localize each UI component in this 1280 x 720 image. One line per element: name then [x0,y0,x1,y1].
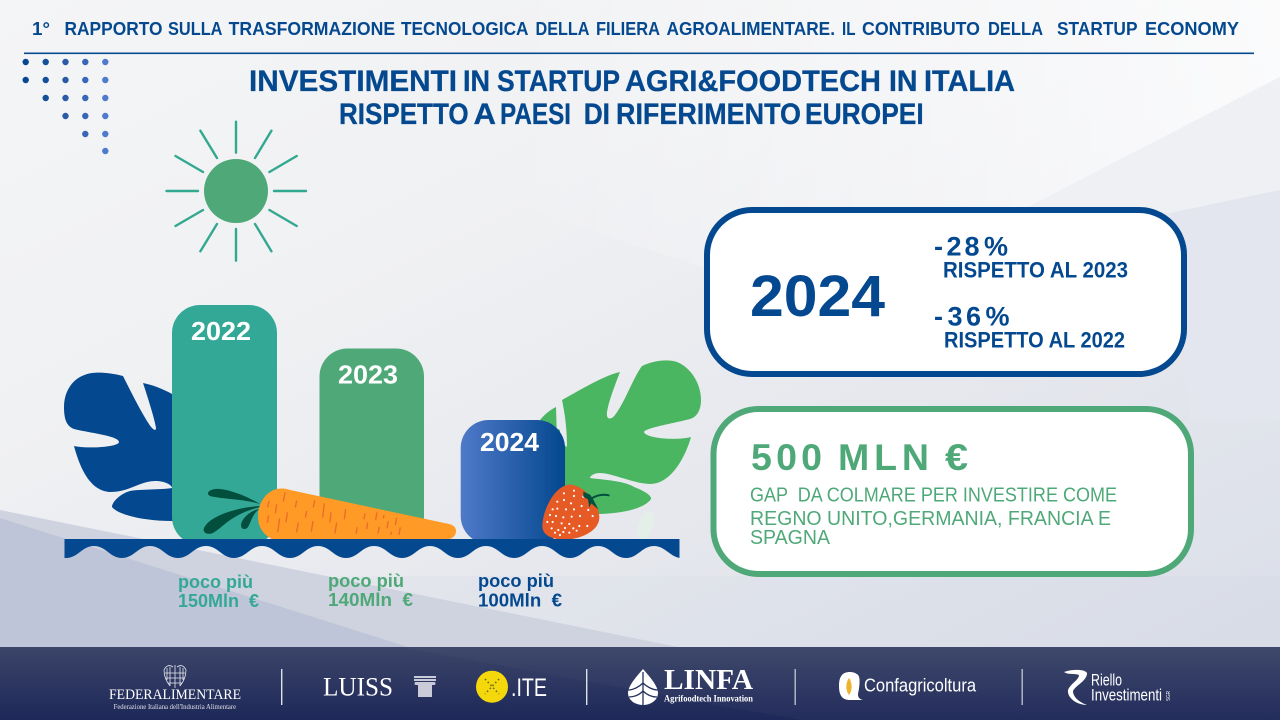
title: IN [463,65,490,98]
gap amount [751,436,968,478]
header text: DELLA [988,19,1043,39]
gap description: GAP DA COLMARE PER INVESTIRE COME [750,484,1117,507]
label 2023: poco più 140Mln: 140Mln € [328,589,413,610]
header text: 1° [32,19,50,39]
gap description: REGNO UNITO,GERMANIA, FRANCIA E [750,507,1111,530]
logo: Confagricoltura: Confagricoltura [864,676,977,696]
bar 2022: 2022 [191,318,251,346]
footer divider 1 [281,669,282,705]
logo: Luiss: LUISS [323,673,393,702]
logo: Riello Investimenti: Riello [1091,671,1122,690]
label 2022: poco più 150Mln [178,571,259,611]
bar 2023: 2023 [338,362,398,390]
header text: TECNOLOGICA [401,19,528,39]
logo: Confagricoltura [839,672,977,700]
title: STARTUP [497,65,620,98]
title: ITALIA [924,65,1015,98]
logo: Linfa: LINFA [664,665,754,696]
bar 2024 [461,420,565,544]
icon: strawberry [542,485,609,540]
header text: FILIERA [596,19,660,39]
header text: SULLA [168,19,222,39]
icon: column [414,676,436,697]
logo: Riello Investimenti: SGR [1166,691,1172,701]
big year: 2024 [750,264,885,329]
stat: minus 36 percent [934,302,1125,353]
label 2024: poco più 100Mln: poco più [478,570,554,591]
decorative dot grid [22,59,109,154]
header text: CONTRIBUTO [862,19,980,39]
gap amount: MLN [838,436,929,478]
wave ground band [60,539,684,558]
panel: 2024 comparison [707,210,1184,374]
header text: ECONOMY [1145,19,1239,39]
footer divider 4 [1022,669,1023,705]
header text [32,19,1239,39]
logo: Linfa [628,665,754,705]
title: IN [889,65,918,98]
title: PAESI [500,98,571,131]
panel: investment gap [714,409,1191,574]
header text: DELLA [536,19,590,39]
icon: blue monstera leaf [64,373,185,521]
title: A [474,98,496,131]
footer divider 3 [794,669,796,705]
logo: X.ITE [476,671,547,703]
logo: Linfa: Agrifoodtech Innovation [664,695,754,705]
footer band [0,647,1280,720]
title: EUROPEI [805,98,924,131]
gap description [750,484,1117,549]
gap amount: 500 [751,436,822,478]
title [249,65,1015,131]
label 2023: poco più 140Mln [328,570,413,610]
title: INVESTIMENTI [249,65,457,98]
header text: TRASFORMAZIONE [229,19,395,39]
label 2024: poco più 100Mln [478,570,562,610]
title: RIFERIMENTO [616,98,801,131]
header rule [24,52,1254,54]
bar chart [172,305,565,545]
title: AGRI&FOODTECH [625,65,881,98]
title: DI [584,98,610,131]
stat: minus 28 percent [934,232,1128,283]
label 2023: poco più 140Mln: poco più [328,570,404,591]
stat: minus 28 percent: -28% [934,232,1008,262]
stat: minus 36 percent: -36% [934,302,1010,332]
stat: minus 28 percent: RISPETTO AL 2023 [943,258,1128,283]
footer divider 2 [586,669,587,705]
icon: pale leaf [634,509,658,541]
logo: Federalimentare: FEDERALIMENTARE [109,687,241,703]
header text: IL [842,19,856,39]
title: RISPETTO [339,98,469,131]
gap description: SPAGNA [750,526,830,549]
header text: STARTUP [1057,19,1138,39]
logo: Federalimentare: Federazione Italiana dell'Industria Alimentare [114,703,236,711]
logo: Riello Investimenti: Investimenti [1091,686,1162,705]
label 2022: poco più 150Mln: poco più [178,571,253,592]
logo: Federalimentare [109,665,241,711]
label 2022: poco più 150Mln: 150Mln € [178,590,259,611]
icon: leaf drop [628,669,658,705]
header text: AGROALIMENTARE. [666,19,835,39]
gap amount: € [945,436,968,478]
logo: Riello Investimenti [1064,670,1172,705]
icon: sun [166,122,306,261]
header text: RAPPORTO [64,19,162,39]
icon: carrot [204,488,456,539]
bar 2024: 2024 [480,429,540,457]
icon: green monstera leaf [540,360,701,514]
label 2024: poco più 100Mln: 100Mln € [478,590,562,610]
stat: minus 36 percent: RISPETTO AL 2022 [944,328,1125,353]
bar 2023 [320,348,424,544]
logo: Luiss [323,673,436,702]
logo: X.ITE: .ITE [511,674,547,702]
bar 2022 [172,305,277,545]
